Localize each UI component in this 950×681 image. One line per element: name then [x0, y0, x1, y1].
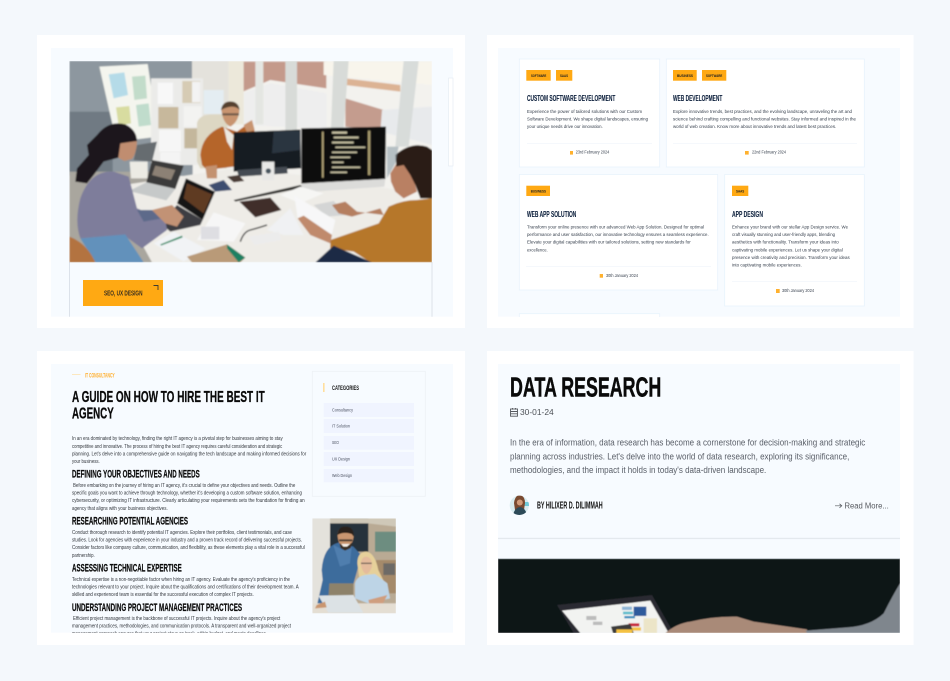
sidebar: categories: CATEGORIES [332, 385, 359, 392]
shelf [151, 78, 203, 165]
section: project management: management approach ensures that your project stays on track, within budget, and meets deadlines. [72, 631, 267, 637]
tag button: SEO, UX Design [83, 280, 163, 306]
card: web development: 22nd February 2024 [752, 150, 787, 155]
center monitor [234, 130, 301, 172]
card: app design: APP DESIGN [732, 209, 763, 219]
front laptop [177, 178, 215, 220]
card outline [70, 262, 432, 317]
section: researching agencies: Conduct thorough research to identify potential IT agencies. Explore their portfolios, client testimonials, and case [72, 530, 292, 536]
article title: A GUIDE ON HOW TO HIRE THE BEST IT [72, 389, 265, 406]
intro paragraph [72, 436, 307, 465]
photo: team working at a shared desk [69, 61, 432, 262]
section: researching agencies: Consider factors like company culture, communication, and flexibility, as these elements play a vital role in a successful [72, 545, 305, 551]
big monitor with code [301, 127, 386, 184]
author name: BY HILIXER D. DILIMMAH [537, 501, 603, 512]
read more link: Read More... [844, 501, 889, 510]
article title [72, 389, 265, 422]
card: web app solution [519, 174, 718, 290]
pot on the ledge [130, 162, 148, 178]
section: defining objectives: DEFINING YOUR OBJECTIVES AND NEEDS [72, 469, 200, 481]
card: web development: science behind crafting compelling and functional websites. Stay informed and inspired in the [673, 117, 856, 123]
section: researching agencies: studies. Look for agencies with experience in your industry and a proven track record of delivering successful projects. [72, 538, 302, 544]
sidebar: categories: Consultancy [332, 408, 354, 412]
card: app design [725, 174, 864, 306]
section: technical expertise: Technical expertise is a non-negotiable factor when hiring an IT agency. Evaluate the agency's proficiency in the [72, 577, 290, 583]
section: defining objectives: Before embarking on the journey of hiring an IT agency, it's crucial to define your objectives and needs. Outline the [73, 483, 295, 489]
section: technical expertise: skilled and experienced team is essential for the successful execution of complex IT projects. [72, 592, 254, 598]
eyebrow: IT consultancy: IT CONSULTANCY [85, 373, 115, 379]
section: defining objectives: agency that aligns with your business objectives. [72, 506, 168, 512]
card: app design: SAAS [736, 190, 745, 194]
card: custom software development: SAAS [560, 74, 568, 78]
section: defining objectives [72, 469, 305, 512]
intro paragraph: planning. Let's delve into a comprehensive guide on navigating the tech landscape and making informed decisions for [72, 451, 307, 457]
section: defining objectives: specific goals you want to achieve through technology, whether it's developing a custom software solution, enhancing [72, 490, 302, 496]
section: technical expertise: technologies relevant to your project. Inquire about the qualifications and certifications of their development team. A [72, 584, 299, 590]
card: app design: craft visually stunning and user-friendly apps, blending [732, 232, 835, 238]
post title: DATA RESEARCH [510, 372, 661, 403]
section: project management: management practices, methodologies, and communication protocols. A transparent and well-organized project [72, 624, 292, 630]
card: custom software development [519, 59, 660, 167]
section: researching agencies: RESEARCHING POTENTIAL AGENCIES [72, 516, 188, 528]
section: project management: Efficient project management is the backbone of successful IT projects. Inquire about the agency's project [73, 616, 281, 622]
card: web app solution: WEB APP SOLUTION [527, 209, 576, 219]
card: custom software development: 23rd February 2024 [576, 150, 610, 155]
panel: data research post [487, 351, 914, 645]
eyebrow: IT consultancy [72, 373, 115, 379]
card: custom software development: CUSTOM SOFTWARE DEVELOPMENT [527, 93, 616, 103]
section: defining objectives: cybersecurity, or optimizing IT infrastructure. Clearly articulating your requirements sets the foundation for finding an [72, 498, 305, 504]
card: app design: presence with creativity and precision. Transform your ideas [732, 255, 850, 261]
card: web app solution: 30th January 2024 [606, 273, 639, 278]
card: app design: captivating mobile experiences. Let us shape your digital [732, 247, 843, 253]
card: web app solution: performance and user satisfaction, our innovative technology ensures a seamless experience. [527, 232, 709, 238]
next card sliver [448, 78, 453, 166]
left woman [75, 123, 137, 183]
section: project management: UNDERSTANDING PROJECT MANAGEMENT PRACTICES [72, 602, 242, 614]
card: app design: Enhance your brand with our stellar App Design service. We [732, 224, 848, 230]
sidebar: categories: UX Design [332, 456, 350, 461]
card: web development: WEB DEVELOPMENT [673, 93, 723, 103]
sidebar: categories [312, 371, 425, 496]
tag button: SEO, UX Design: SEO, UX DESIGN [104, 291, 142, 298]
photo: hand on a laptop against a dark background [498, 559, 900, 633]
panel: post card grid [487, 35, 914, 334]
photo: two colleagues at a laptop [312, 518, 396, 613]
post excerpt [510, 438, 866, 475]
post excerpt: methodologies, and the impact it holds in today's data-driven landscape. [510, 465, 766, 475]
card: web app solution: excellence. [527, 247, 548, 253]
section: researching agencies: partnership. [72, 553, 95, 559]
card: web development: SOFTWARE [706, 74, 723, 78]
papers and objects on desk [197, 212, 245, 242]
sidebar: categories: Web Design [332, 473, 352, 478]
panel: article on hiring an IT agency [37, 351, 465, 645]
card: web app solution: BUSINESS [531, 190, 546, 194]
center man [197, 114, 227, 168]
intro paragraph: In an era dominated by technology, finding the right IT agency is a pivotal step for businesses aiming to stay [72, 436, 283, 442]
card: custom software development: your unique needs drive our innovation. [527, 124, 603, 130]
sidebar: categories: IT Solution [332, 424, 350, 429]
post excerpt: planning across industries. Let's delve into the world of data research, exploring its significance, [510, 452, 849, 462]
right person [296, 202, 335, 234]
intro paragraph: competitive and innovative. The process of hiring the best IT agency requires careful consideration and strategic [72, 444, 283, 450]
card: web development: Explore innovative trends, best practices, and the evolving landscape, unraveling the art and [673, 109, 852, 115]
section: technical expertise [72, 563, 299, 598]
card: web app solution: Elevate your digital capabilities with our tailored solutions, setting new standards for [527, 240, 691, 246]
whiteboard [98, 63, 152, 140]
icon: calendar [510, 408, 518, 416]
card: web development: BUSINESS [677, 74, 693, 78]
card: app design: into captivating mobile experiences. [732, 262, 802, 268]
card: custom software development: Experience the power of tailored solutions with our Custom [527, 109, 642, 115]
hand [665, 617, 807, 633]
card: custom software development: SOFTWARE [531, 74, 547, 78]
section: researching agencies [72, 516, 305, 559]
sidebar: categories: SEO [332, 440, 339, 445]
card: next row, cropped [519, 314, 660, 317]
panel: featured post card [37, 35, 465, 328]
card: web app solution: Transform your online presence with our advanced Web App Solution. Designed for optimal [527, 224, 704, 230]
desk [130, 174, 314, 262]
card: custom software development: Software Development. We shape digital landscapes, ensuring [527, 117, 648, 123]
card: web development: world of web creation. Know more about innovative trends and latest best practices. [673, 124, 836, 130]
left laptop [146, 160, 184, 189]
striped sleeve [805, 583, 900, 633]
article title: AGENCY [72, 405, 114, 422]
section: project management [72, 603, 291, 633]
laptop [557, 595, 674, 633]
card: app design: 30th January 2024 [782, 288, 815, 293]
author avatar [510, 496, 529, 515]
card: web development [666, 59, 864, 167]
intro paragraph: your business. [72, 459, 100, 465]
post excerpt: In the era of information, data research has become a cornerstone for decision-making and strategic [510, 438, 866, 448]
section: technical expertise: ASSESSING TECHNICAL EXPERTISE [72, 563, 182, 575]
post date: 30-01-24 [520, 408, 554, 417]
card: app design: aesthetics with functionality. Transform your ideas into [732, 240, 839, 246]
